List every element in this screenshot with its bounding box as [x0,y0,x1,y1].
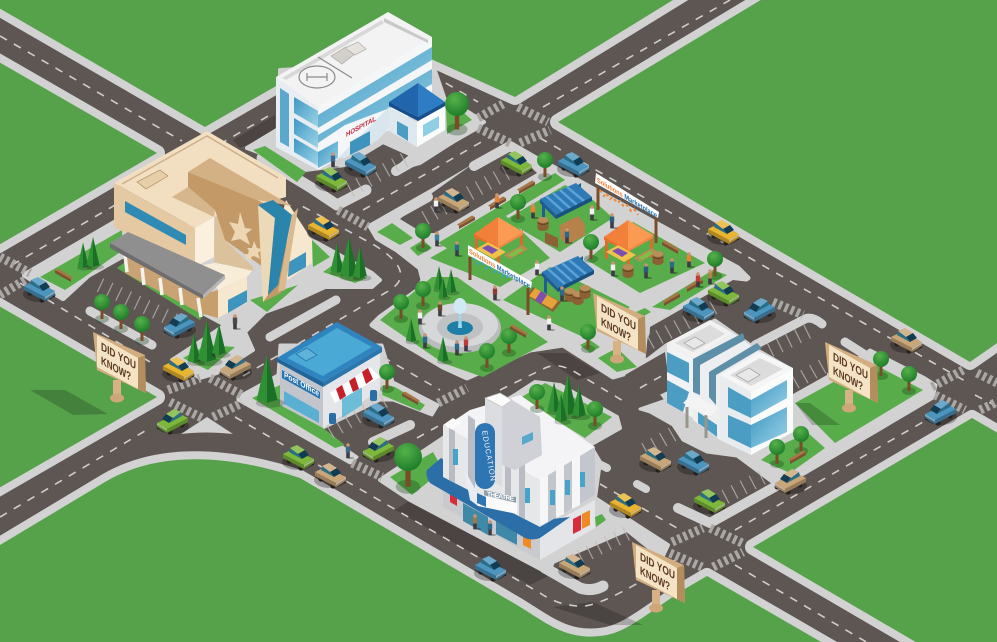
billboard: right: KNOW? [833,364,863,394]
green: bottom field [0,459,835,642]
post office door [342,387,362,418]
curb island: post lot [373,425,410,442]
asphalt: market right lot [648,280,750,362]
rear block left face [667,343,693,418]
block: star building sidewalk [25,218,150,298]
green patch: cones top [323,260,367,283]
green patch: star right [312,240,330,267]
theatre [426,393,595,560]
asphalt: market lot [400,146,537,233]
rear glass [667,352,689,383]
hospital left windows [294,97,318,127]
mid wall [693,333,760,440]
asphalt: road behind office [625,352,670,404]
roof surface [114,131,286,228]
roof unit [296,348,317,361]
mailbox [329,413,336,424]
billboard: market [593,293,646,364]
green patch: post office front [252,385,345,448]
green patch: theatre tree [390,452,443,495]
crosswalks [0,104,997,567]
green: right stall [587,222,705,293]
upper box right face [195,217,214,267]
tree: hospital [445,92,469,136]
block: office sidewalk [640,320,936,484]
barrels top stall [538,217,548,231]
tan wall return [200,290,218,318]
entrance block left [389,107,417,147]
green patch: hospital tree [446,108,472,134]
blue stall top [540,183,592,221]
parking bay lines [100,158,825,557]
billboard: left [93,332,146,402]
orange panel left [523,535,531,549]
marquee [464,469,517,514]
stars [229,212,262,260]
traffic island [181,417,233,434]
mailbox [370,390,377,401]
green: left patch [377,223,413,245]
right glass [751,380,787,418]
green: top strip [438,173,565,250]
upper box left face [114,183,195,267]
rear roof [667,320,733,358]
block: central market sidewalk [370,145,748,378]
canopy [110,232,225,295]
wing window [288,252,306,277]
front block right face [751,368,793,455]
produce top stall [545,232,558,248]
billboard: bottom: KNOW? [640,564,670,594]
roof recess [172,187,215,217]
curb: market lot [383,197,428,222]
hospital sign: HOSPITAL [346,114,376,139]
block: hospital sidewalk [247,62,484,170]
banner: right: Solutions Marketplace [597,176,657,220]
barrels bottom stall [564,288,576,302]
green: billboard patch [598,348,637,372]
green: lower right field [753,418,997,642]
block: star building plaza [125,215,380,378]
left ribs [449,415,525,519]
canopy [426,458,570,540]
curb: theatre lower lot [545,568,603,590]
red panel right [573,515,581,534]
entrance wall [338,107,389,158]
base right wall [540,500,595,560]
fountain water [447,321,473,335]
left upper facade [443,425,540,527]
curb: lower office lot [678,484,780,523]
roof parapet line [122,136,278,184]
post office sign [282,370,320,399]
billboard: left: DID YOU [101,340,136,372]
fountain inner ring [437,313,483,341]
green: left stall [430,215,550,287]
helipad [299,57,352,88]
produce table [527,287,561,312]
rear roof unit [684,337,705,349]
left wall [280,362,323,428]
marquee: THEATRE [487,491,515,503]
green patch: star front [250,285,298,312]
green block: billboard lawn [795,362,923,443]
columns [687,407,706,438]
billboard: right [825,342,878,412]
banner: left [468,245,532,315]
upper box window [125,201,186,245]
hospital roof [276,12,432,107]
green: fountain park [380,277,548,377]
orange stall right [604,220,658,268]
office building [667,320,793,455]
lot island pill [637,484,646,489]
curb: hospital lot right [396,124,478,171]
tower right block [502,400,542,470]
cream step top [203,263,253,290]
barrels bottom stall [580,285,590,299]
rib tops [443,418,461,429]
right upper facade [540,447,595,527]
green patch: post office right [382,385,425,411]
orange stall left [474,217,528,265]
hospital glazing upper [318,47,432,128]
billboard: market: KNOW? [601,315,631,345]
curb: hospital lot left [262,158,366,205]
market stalls [474,183,664,312]
green: small diamond [636,308,651,317]
hospital glazing low [318,141,338,168]
asphalt: office right lot [793,350,827,394]
post office [277,322,382,428]
green strip: under canopy [117,262,205,320]
tan wall under canopy [125,255,200,313]
right wing [270,200,312,280]
blue stall bottom [542,256,594,294]
cars [23,151,957,582]
mid blue strip 1 [693,333,745,395]
left glass [728,387,751,418]
green patch: theatre cones [520,383,612,438]
tan step wall [214,210,253,271]
front block roof [720,352,793,392]
star building [110,131,312,318]
post office sign text: Post Office [284,370,319,398]
tower top [485,393,512,407]
education sign: EDUCATION [480,430,498,483]
panel pale strip [258,205,275,302]
orange panel right [582,510,590,529]
roof plane [443,395,595,480]
hospital left face [276,77,318,170]
front block left face [720,375,751,455]
benches [55,180,806,464]
curb island: centre road [270,300,336,337]
barrels right stall [652,251,664,265]
entrance block right [417,106,445,147]
panel trim [278,208,298,292]
canopy [683,394,718,417]
hospital [276,12,445,170]
billboard: left: KNOW? [101,354,131,384]
hospital blue roof [389,83,445,121]
green patch: theatre right [595,514,606,527]
hospital glazing mid [318,69,432,143]
theatre doors [463,503,488,535]
base left wall [443,480,540,560]
slab top [188,158,292,206]
entrance door [698,412,717,437]
front roof unit [736,368,760,382]
hospital right face [318,37,432,170]
ground shadow: billboard lawn [795,403,840,425]
asphalt: star lot [95,268,205,345]
panel glass [258,200,292,295]
green patch: hospital left [253,146,306,182]
road shadows [100,115,643,625]
block: theatre sidewalk [380,382,668,573]
green: tree patch [580,340,600,353]
mid blue strip 2 [709,343,762,405]
theatre windows [453,449,585,505]
green: upper left field [0,54,157,253]
canopy columns [125,255,201,317]
curb: office lot top [755,318,822,345]
post office roof [277,322,382,382]
fountain jet [458,312,462,328]
banner: right [595,173,659,243]
hospital window strip [280,88,289,147]
star panel [188,172,290,302]
red panel [450,492,457,506]
green: lower stall [503,267,630,337]
green patch: office tree patch [761,433,825,473]
billboard: bottom: DID YOU [640,550,675,582]
green: top stall [505,185,613,252]
rooftop units [331,42,366,64]
right ribs [540,453,580,526]
right wall [323,352,380,428]
hospital door [350,131,370,155]
billboard: market: DID YOU [601,301,636,333]
green: right strip [652,270,727,310]
green patch: star building left [40,230,123,290]
barrels right stall front [622,264,634,278]
green: tree patch left [410,240,432,256]
trees [94,152,917,494]
education sign [475,423,498,489]
block: post office sidewalk [238,345,438,463]
barrels bottom stall [572,291,584,305]
green: middle left field [0,298,157,496]
green: top field [0,0,686,127]
fountain plaza [419,298,501,353]
tower window [522,432,533,445]
rooftop unit [137,170,168,189]
green: upper right field [558,0,997,362]
cream lower wall [218,277,247,318]
entrance left window [397,121,408,141]
market greens [377,173,727,377]
entrance right window [423,116,439,137]
tower left face [485,398,502,487]
post office windows [284,391,319,423]
awning [330,367,380,403]
curb: theatre right stub [597,463,607,468]
people [233,152,716,536]
billboard: bottom [632,542,685,612]
city blocks [25,62,936,590]
fountain outer ring [419,303,501,353]
billboard shadows [30,390,108,415]
billboard: right: DID YOU [833,350,868,382]
curb: market lot top [474,146,536,166]
crates top stall [560,216,585,245]
curb: billboard right stub [845,342,870,358]
curb: star lot island [90,311,152,345]
lower door [228,290,247,313]
cone trees [77,236,591,425]
green patch: cones bottom [183,345,235,370]
banner: left: Solutions Marketplace [469,247,530,290]
